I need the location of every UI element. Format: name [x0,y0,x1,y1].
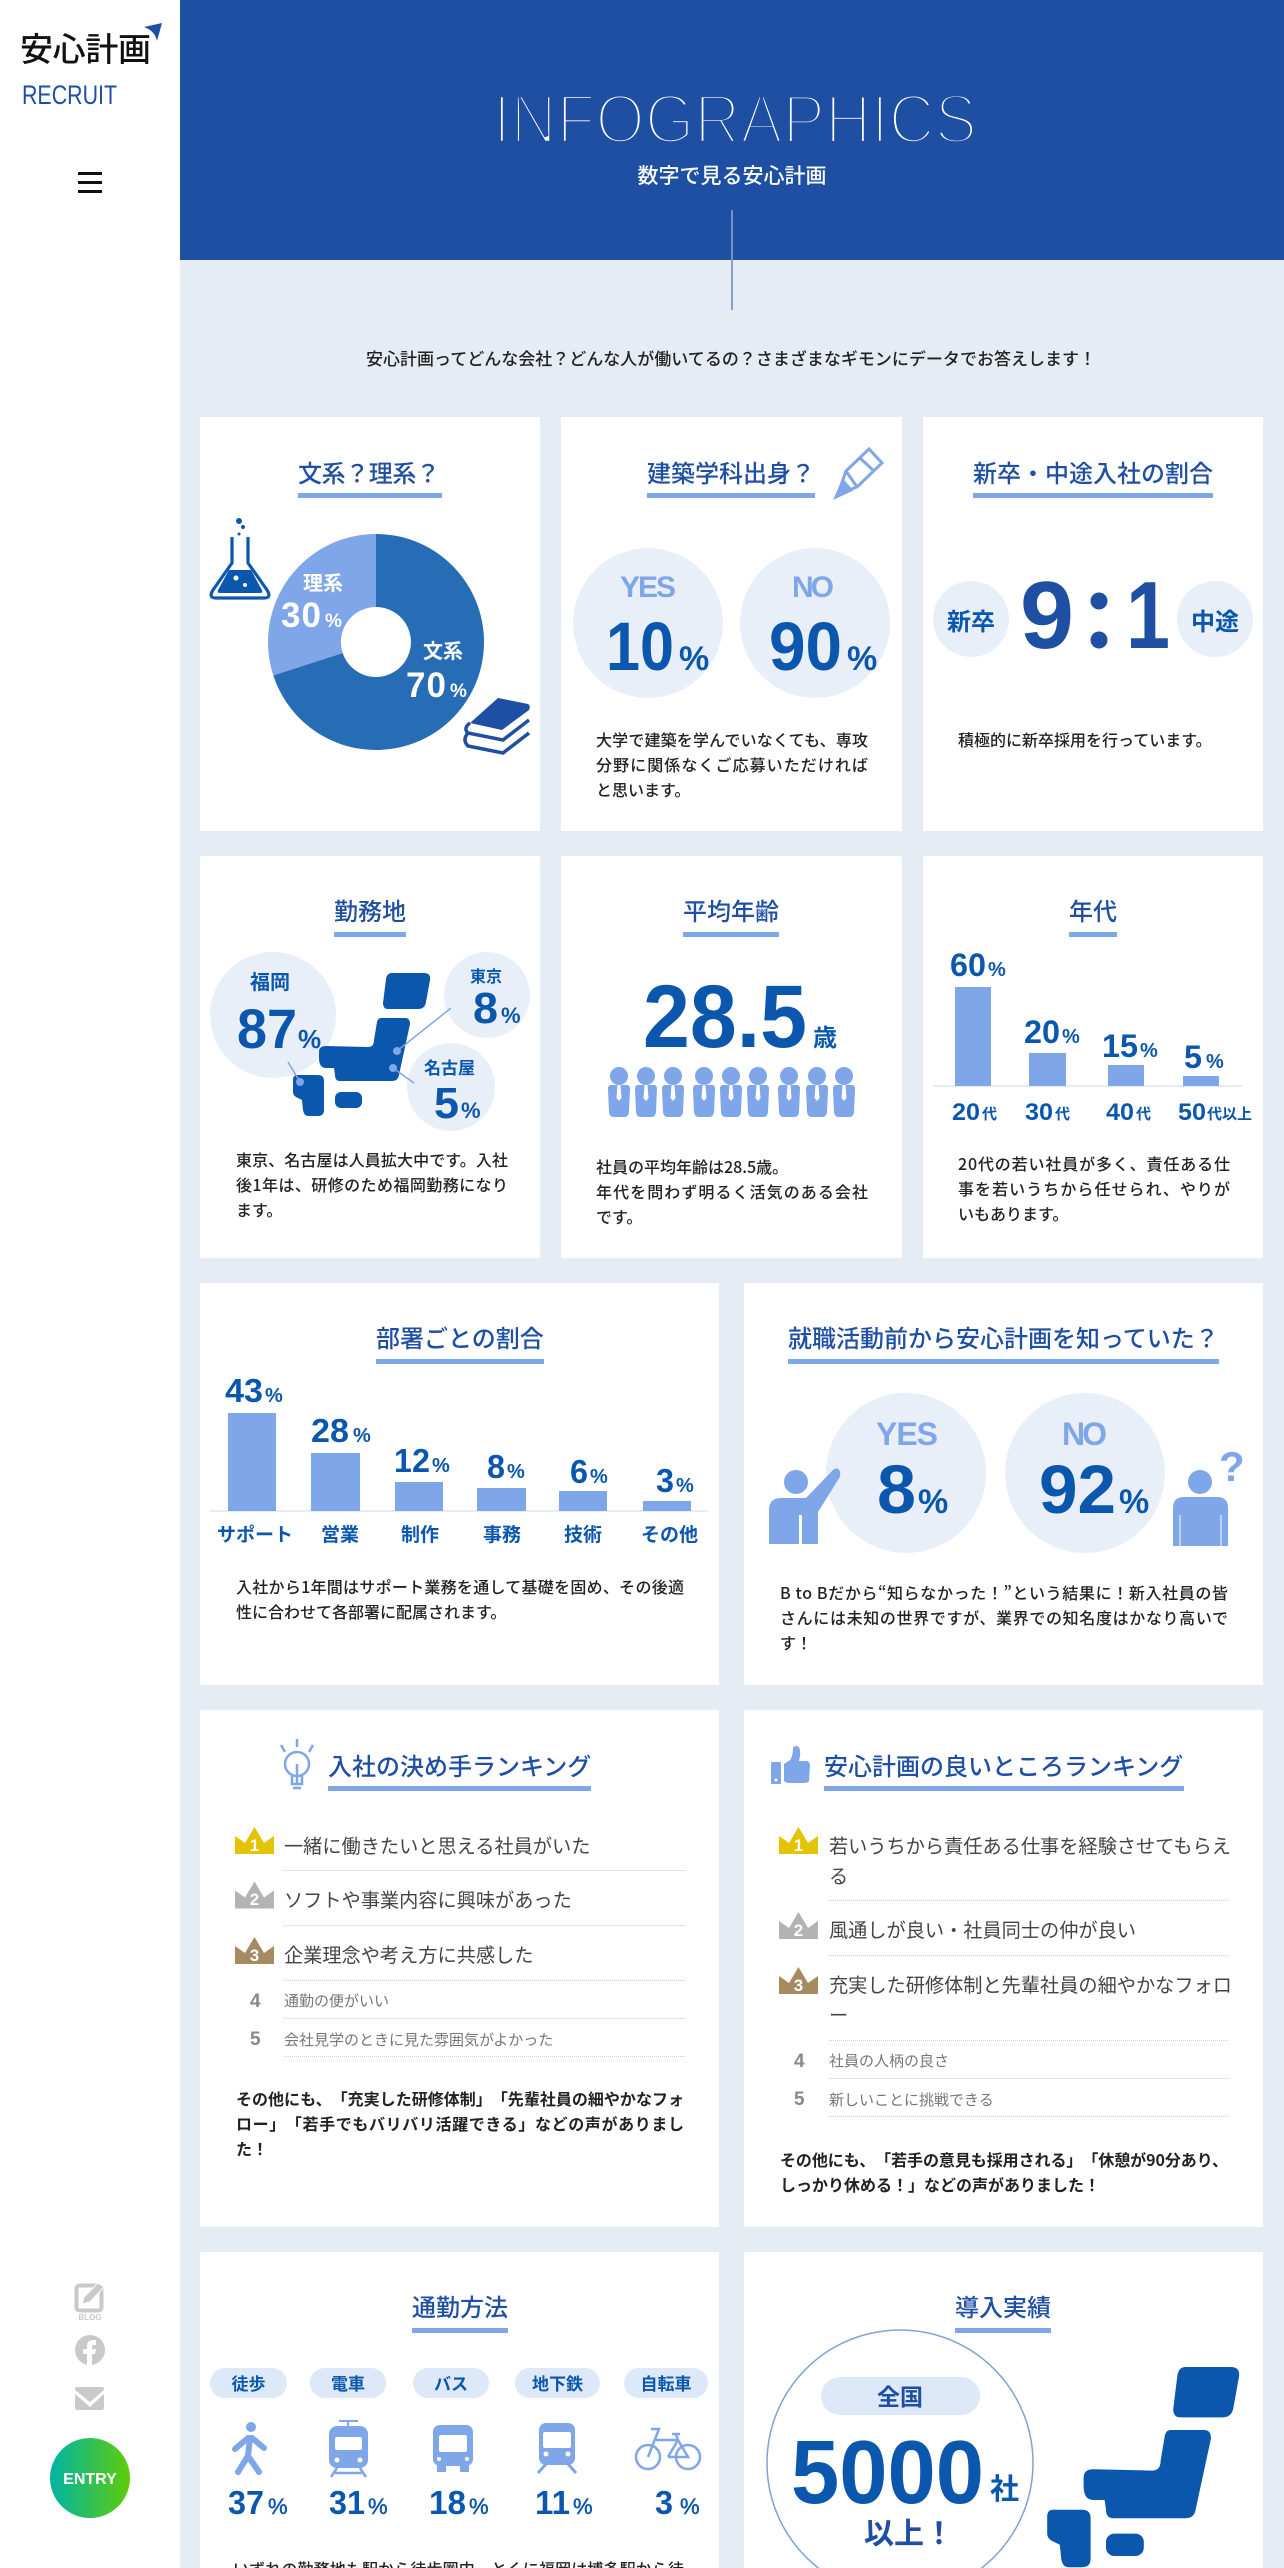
icon: bus [433,2425,473,2472]
panel: track record [744,2252,1263,2568]
description: 積極的に新卒採用を行っています。 [958,727,1212,751]
intro text: 安心計画ってどんな会社？どんな人が働いてるの？さまざまなギモンにデータでお答えします！ [366,345,1096,370]
bar chart: 営業 [321,1520,359,1547]
no circle: NO [792,571,834,604]
fukuoka bubble: 福岡 [250,966,290,995]
heading: 新卒・中途入社の割合 [973,454,1213,489]
bar chart: 代 [982,1103,997,1124]
description: ロー」「若手でもバリバリ活躍できる」などの声がありまし [236,2111,684,2135]
description: その他にも、「若手の意見も採用される」「休憩が90分あり、 [780,2147,1228,2171]
donut chart: 30 [281,596,321,635]
transport pills: バス [434,2370,468,2395]
recruit label: RECRUIT [22,80,117,110]
nagoya bubble: 5 [434,1079,459,1128]
percentages: % [680,2494,700,2519]
fukuoka bubble [210,952,336,1078]
bar chart: 8 [487,1448,505,1485]
description: いもあります。 [958,1201,1068,1225]
transport pills: 自転車 [640,2370,692,2395]
menu icon [78,172,102,193]
heading: 文系？理系？ [298,454,440,489]
bar chart: 5 [1184,1039,1202,1075]
heading: 勤務地 [334,892,406,927]
ranking list: 企業理念や考え方に共感した [284,1940,533,1968]
icon: blog: BLOG [78,2313,102,2322]
bar chart: % [1206,1051,1224,1073]
no circle [1005,1393,1165,1553]
fukuoka bubble: % [298,1024,321,1054]
transport pills: 徒歩 [232,2370,266,2395]
description: です。 [596,1204,642,1228]
ranking list: 4 [250,1991,261,2012]
description: 性に合わせて各部署に配属されます。 [236,1599,506,1623]
ranking list: ー [829,2000,848,2028]
bar chart: 43 [225,1372,263,1409]
bar chart: 20 [1024,1014,1060,1050]
percentages: % [268,2494,288,2519]
bar chart: 3 [656,1462,674,1499]
bar chart: その他 [641,1520,698,1547]
japan map [293,973,430,1116]
age number: 28.5 [643,966,807,1066]
donut chart: 理系 [303,567,343,596]
header band [180,0,1284,260]
mid-career circle: 中途 [1191,602,1239,637]
ranking list: 5 [794,2089,805,2110]
icon: person wondering [1173,1443,1245,1546]
percentages: % [573,2494,593,2519]
heading: 平均年齢 [683,892,779,927]
icon: facebook [75,2335,105,2365]
ranking list: 4 [794,2051,805,2072]
donut chart: % [325,611,342,632]
vertical connector line [732,210,733,310]
panel: commuting [200,2252,719,2568]
subtitle: 数字で見る安心計画 [638,160,826,190]
nagoya bubble: % [461,1098,481,1123]
ranking list [235,1827,685,2056]
tokyo bubble: 東京 [470,963,502,987]
description [236,1574,684,1623]
no circle: 90 [769,608,842,685]
bar chart: % [590,1466,608,1488]
outlined circle stat: 5000 [791,2423,984,2523]
percentages: % [368,2494,388,2519]
tokyo bubble [444,952,530,1038]
panel: humanities or science [200,417,540,831]
heading: 入社の決め手ランキング [328,1747,591,1782]
icon: tram [329,2421,368,2477]
transport pills: 電車 [331,2370,365,2395]
heading: 導入実績 [955,2288,1051,2323]
description: 東京、名古屋は人員拡大中です。入社 [236,1147,508,1171]
yes circle [573,548,723,698]
description [958,1151,1230,1225]
icon: walking [235,2422,264,2472]
description: す！ [780,1630,812,1654]
icon: pencil [836,449,882,497]
ranking list: 3 [794,1976,803,1995]
transport pills: 地下鉄 [532,2370,583,2395]
panel: awareness [744,1283,1263,1685]
ranking list: 会社見学のときに見た雰囲気がよかった [284,2029,553,2050]
heading: 年代 [1069,892,1117,927]
panel: good points ranking [744,1710,1263,2227]
description: 20代の若い社員が多く、責任ある仕 [958,1151,1230,1175]
ranking list: 新しいことに挑戦できる [829,2089,994,2110]
people row [608,1067,855,1117]
bar chart: 40 [1106,1099,1134,1126]
new grad circle [933,581,1009,657]
bar chart [933,947,1252,1126]
icon: person raising hand [769,1468,840,1544]
yes circle: 10 [606,608,674,685]
percentages: % [469,2494,489,2519]
description [780,2147,1228,2196]
donut chart [268,534,484,750]
yes circle: YES [876,1416,938,1452]
description: 年代を問わず明るく活気のある会社 [596,1179,868,1203]
ratio: 9 [1020,562,1074,669]
tokyo bubble: % [501,1003,521,1028]
description: しっかり休める！」などの声がありました！ [780,2172,1100,2196]
bar chart: 技術 [564,1520,602,1547]
bar chart: サポート [217,1520,293,1547]
panel: departments [200,1283,719,1685]
percentages [228,2484,700,2521]
heading: 建築学科出身？ [647,454,815,489]
bar chart: % [507,1461,525,1483]
bar chart: 代以上 [1207,1103,1252,1124]
panel: deciding factors ranking [200,1710,719,2227]
location markers [288,1008,451,1086]
yes circle: % [679,640,709,678]
ratio [1020,562,1170,669]
percentages: 31 [329,2484,365,2521]
description: B to Bだから“知らなかった！”という結果に！新入社員の皆 [780,1580,1228,1604]
age number: 歳 [813,1018,837,1053]
ranking list: ソフトや事業内容に興味があった [284,1885,572,1913]
bar chart: % [1062,1026,1080,1048]
description [780,1580,1228,1654]
no circle: % [847,640,877,678]
ranking list: 若いうちから責任ある仕事を経験させてもらえ [829,1831,1231,1859]
mid-career circle [1177,581,1253,657]
japan map [1047,2367,1239,2567]
ranking list: 1 [794,1836,803,1855]
outlined circle stat: 全国 [877,2378,923,2412]
description [596,727,868,801]
bar chart: 28 [311,1412,349,1449]
bar chart [210,1372,708,1547]
bar chart: % [988,959,1006,981]
bar chart: 50 [1178,1099,1206,1126]
logo: 安心計画 [20,23,151,71]
transport pills [210,2368,708,2398]
donut chart: 文系 [423,635,463,664]
description: た！ [236,2136,268,2160]
panel: age groups [923,856,1263,1258]
bar chart: 代 [1136,1103,1151,1124]
nagoya bubble [407,1043,495,1131]
description [236,1147,508,1221]
description: 後1年は、研修のため福岡勤務になり [236,1172,508,1196]
ranking list: 充実した研修体制と先輩社員の細やかなフォロ [829,1970,1232,1998]
icon: bicycle [636,2429,700,2469]
ranking list: 2 [794,1921,803,1940]
ranking list: 風通しが良い・社員同士の仲が良い [829,1915,1136,1943]
bar chart: 30 [1025,1099,1053,1126]
description [596,1154,868,1228]
panel: work location [200,856,540,1258]
ranking list: る [829,1861,848,1889]
bar chart: 制作 [401,1520,439,1547]
description: 分野に関係なくご応募いただければ [596,752,868,776]
bar chart: 事務 [483,1520,521,1547]
no circle [740,548,890,698]
ranking list: 5 [250,2029,261,2050]
bar chart: 15 [1102,1028,1138,1064]
ranking list: 3 [250,1946,259,1965]
icon: blog [76,2283,104,2322]
percentages: 18 [429,2484,466,2521]
bar chart: 6 [570,1453,588,1490]
icon: books [465,698,530,753]
ratio: 1 [1126,562,1170,669]
outlined circle stat: 以上！ [864,2509,954,2553]
heading: 就職活動前から安心計画を知っていた？ [788,1319,1219,1354]
ranking list: 通勤の便がいい [284,1990,389,2011]
description: ます。 [236,1197,282,1221]
nagoya bubble: 名古屋 [424,1054,475,1079]
bar chart: 60 [950,947,986,983]
no circle: 92 [1039,1451,1116,1528]
icon: mail [75,2387,104,2410]
icon: subway [538,2423,576,2473]
description: さんには未知の世界ですが、業界での知名度はかなり高いで [780,1605,1228,1629]
new grad circle: 新卒 [947,602,995,637]
no circle: NO [1062,1416,1107,1452]
tokyo bubble: 8 [473,984,498,1033]
percentages: 37 [228,2484,264,2521]
outlined circle stat [767,2330,1033,2568]
heading: 安心計画の良いところランキング [824,1747,1183,1782]
icon: flask [211,518,269,598]
bar chart: % [676,1475,694,1497]
title: INFOGRAPHICS [493,80,977,158]
bar chart: 20 [952,1099,980,1126]
ranking list: 社員の人柄の良さ [829,2050,949,2071]
yes circle: YES [620,571,676,604]
outlined circle stat: 社 [990,2466,1019,2508]
entry button [50,2438,130,2518]
percentages: 3 [655,2484,673,2521]
description [236,2086,684,2160]
bar chart: % [265,1385,283,1407]
donut chart: % [450,681,467,702]
heading: 通勤方法 [412,2288,508,2323]
yes circle: % [918,1483,948,1521]
ranking list: 1 [250,1836,259,1855]
sidebar [0,0,180,2568]
icon: thumbs up [771,1746,810,1784]
description: 大学で建築を学んでいなくても、専攻 [596,727,868,751]
bar chart: % [353,1425,371,1447]
icon: light bulb [281,1739,313,1788]
description: 社員の平均年齢は28.5歳。 [596,1154,788,1178]
panel: new grad ratio [923,417,1263,831]
bar chart: 12 [394,1442,430,1479]
description: その他にも、「充実した研修体制」「先輩社員の細やかなフォ [236,2086,684,2110]
description: 入社から1年間はサポート業務を通して基礎を固め、その後適 [236,1574,684,1598]
yes circle [826,1393,986,1553]
bar chart: % [432,1455,450,1477]
fukuoka bubble: 87 [237,997,297,1060]
donut chart: 70 [406,666,446,705]
bar chart: 代 [1055,1103,1070,1124]
ranking list: 2 [250,1890,259,1909]
percentages: 11 [535,2484,570,2521]
icon: person wondering: ? [1219,1443,1245,1490]
panel: architecture background [561,417,902,831]
bar chart: % [1140,1040,1158,1062]
description: と思います。 [596,777,690,801]
entry button: ENTRY [63,2471,117,2488]
yes circle: 8 [877,1451,916,1528]
panel: average age [561,856,902,1258]
no circle: % [1119,1483,1149,1521]
ranking list [779,1827,1232,2116]
description: 事を若いうちから任せられ、やりが [958,1176,1230,1200]
ranking list: 一緒に働きたいと思える社員がいた [284,1831,590,1859]
heading: 部署ごとの割合 [376,1319,544,1354]
